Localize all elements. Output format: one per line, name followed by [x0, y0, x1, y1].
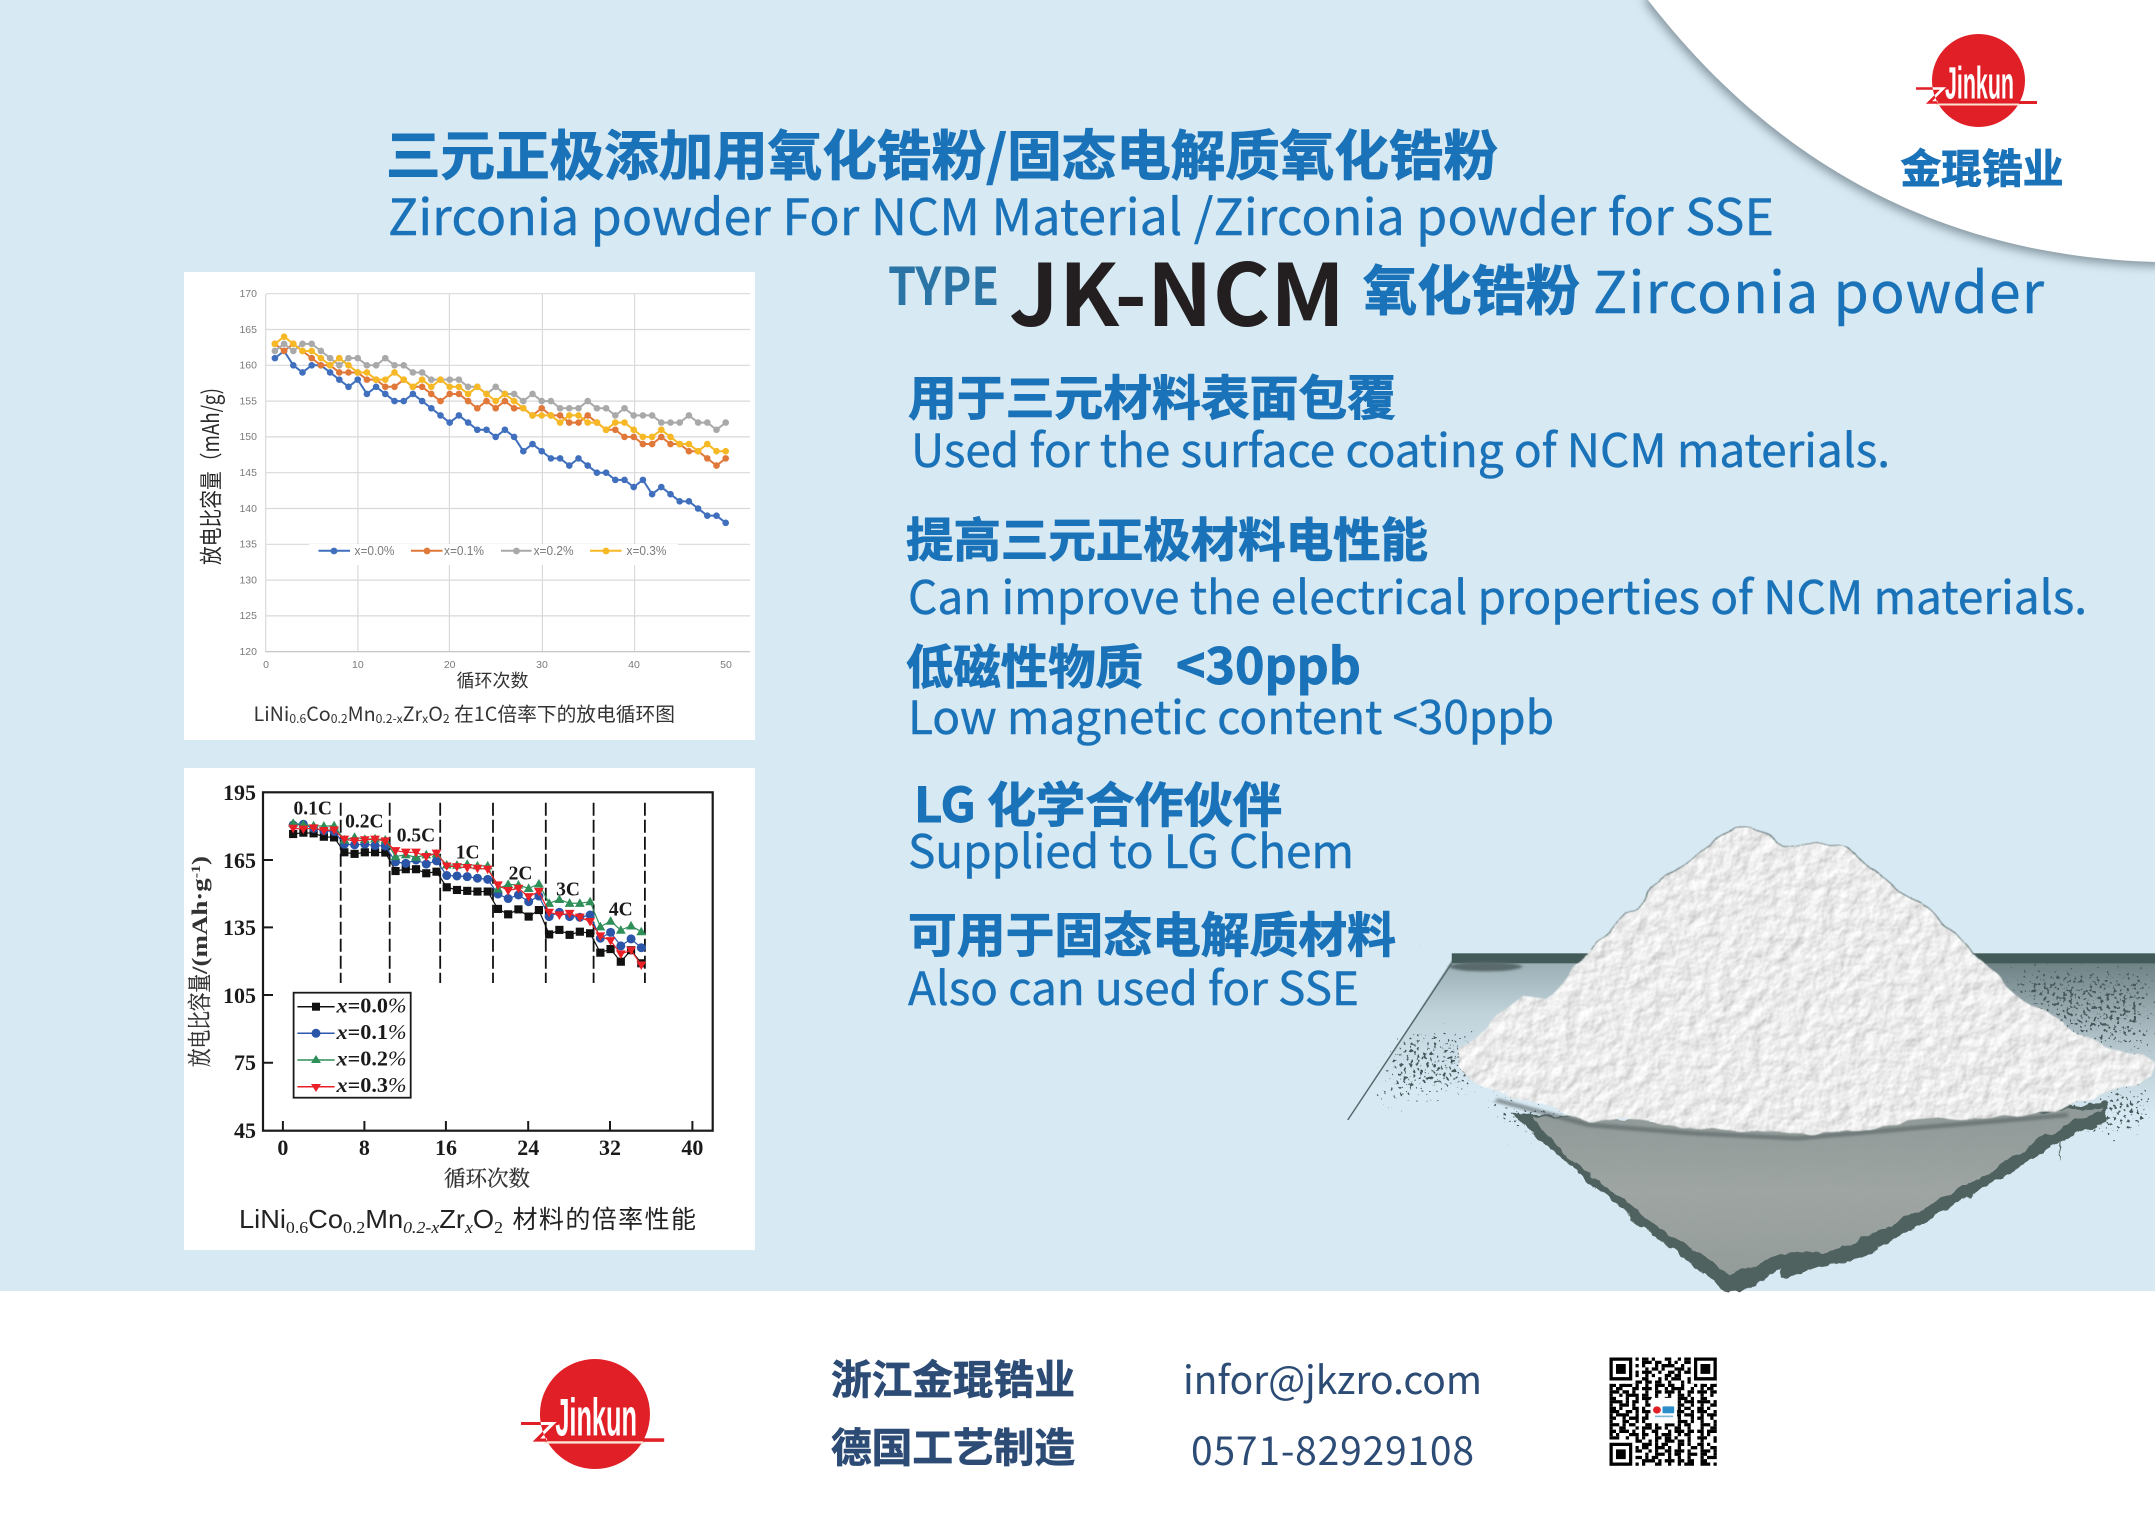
y axis ticks: 160	[239, 360, 257, 372]
footer logo: Jinkun: Jinkun	[555, 1388, 637, 1447]
feature: SSE: 可用于固态电解质材料	[908, 896, 1396, 966]
y axis ticks: 140	[239, 503, 257, 515]
y axis title	[187, 856, 214, 1067]
feature: surface coating	[908, 359, 1890, 481]
brand name: 金琨锆业	[1900, 136, 2064, 195]
caption: 0.2	[331, 710, 348, 727]
y axis title: -1	[188, 865, 203, 878]
caption: Mn	[348, 698, 376, 727]
rate labels: 0.2C	[345, 812, 384, 832]
feature: LG Chem	[908, 766, 1354, 882]
legend: x=0.3%	[335, 1073, 406, 1097]
feature: electrical properties	[906, 502, 2087, 628]
caption: 0.6	[286, 1218, 308, 1237]
white footer band	[0, 1291, 2155, 1519]
type line	[888, 226, 2045, 351]
x axis title: 循环次数	[456, 667, 528, 693]
caption: Zr	[403, 698, 423, 727]
y axis title: 放电比容量（mAh/g)	[192, 388, 226, 565]
title: Chinese: 三元正极添加用氧化锆粉/固态电解质氧化锆粉	[386, 112, 1498, 191]
QR code	[1610, 1358, 1717, 1466]
legend	[318, 544, 666, 558]
y axis ticks: 155	[239, 396, 257, 408]
y axis ticks	[239, 288, 257, 658]
x axis ticks: 16	[435, 1135, 457, 1160]
feature: LG Chem: Supplied to LG Chem	[908, 816, 1354, 882]
white curved corner panel	[1648, 0, 2155, 262]
caption: 0.2	[343, 1218, 365, 1237]
x axis title: 循环次数	[444, 1167, 530, 1191]
y axis title: 放电比容量	[187, 974, 214, 1067]
panel: rate chart	[184, 768, 755, 1250]
glass plate	[1348, 953, 2155, 1133]
feature: SSE	[908, 896, 1396, 1019]
y axis title: /(mAh·g	[187, 896, 212, 974]
y axis ticks: 165	[239, 324, 257, 336]
caption: Zr	[439, 1204, 465, 1234]
x axis ticks: 30	[536, 659, 548, 671]
caption: Mn	[365, 1204, 403, 1234]
type line: Zirconia powder	[1593, 248, 2045, 330]
x axis ticks: 0	[277, 1135, 288, 1160]
rate labels: 0.1C	[293, 798, 332, 820]
contact details: infor@jkzro.com	[1183, 1350, 1482, 1406]
x axis ticks: 40	[628, 659, 640, 671]
y axis ticks: 120	[239, 646, 257, 658]
plot frame	[263, 792, 713, 1131]
x axis ticks: 40	[681, 1135, 703, 1160]
caption: 2	[494, 1218, 503, 1237]
company name: 德国工艺制造	[831, 1415, 1075, 1474]
caption: Co	[306, 698, 331, 727]
header logo: Jinkun: Jinkun	[1945, 58, 2014, 108]
caption: O	[428, 698, 443, 727]
rate labels: 0.5C	[397, 826, 435, 846]
caption: 0.2-x	[403, 1218, 440, 1237]
company name: 浙江金琨锆业	[831, 1347, 1075, 1406]
x axis ticks	[277, 1135, 703, 1160]
feature: SSE: Also can used for SSE	[908, 953, 1359, 1019]
reflection of pile	[1512, 1103, 2107, 1295]
x axis ticks: 32	[599, 1135, 621, 1160]
feature: low magnetic: Low magnetic content <30ppb	[908, 682, 1554, 748]
y axis ticks: 135	[223, 915, 256, 940]
y axis ticks: 75	[234, 1050, 256, 1075]
x axis ticks: 50	[720, 659, 732, 671]
feature: surface coating: 用于三元材料表面包覆	[908, 359, 1396, 429]
caption: x	[422, 710, 428, 727]
y axis ticks: 125	[239, 610, 257, 622]
y axis ticks	[223, 780, 256, 1143]
y axis ticks: 170	[239, 288, 257, 300]
title: English: Zirconia powder For NCM Material /Zirconia powder for SSE	[388, 178, 1774, 250]
legend: x=0.0%	[354, 544, 394, 558]
rate labels: 1C	[456, 842, 480, 864]
y axis ticks: 145	[239, 467, 257, 479]
caption: LiNi	[254, 698, 289, 727]
x axis ticks	[263, 659, 732, 671]
caption: 0.6	[289, 710, 307, 727]
feature: low magnetic: <30ppb	[1176, 627, 1361, 699]
y axis ticks: 45	[234, 1118, 256, 1143]
legend: x=0.0%	[335, 994, 406, 1018]
feature: electrical properties: 提高三元正极材料电性能	[906, 502, 1428, 571]
series	[293, 823, 641, 965]
y axis ticks: 135	[239, 538, 257, 550]
rate labels	[293, 798, 633, 920]
caption: O	[473, 1204, 494, 1234]
caption: 2	[443, 710, 450, 727]
caption	[239, 1200, 696, 1237]
panel: cycle chart	[184, 272, 755, 740]
caption: Co	[308, 1204, 343, 1234]
x axis ticks: 20	[444, 659, 456, 671]
legend	[294, 993, 411, 1098]
feature: surface coating: Used for the surface coating of NCM materials.	[911, 415, 1890, 481]
type line: 氧化锆粉	[1363, 247, 1580, 326]
caption: x	[464, 1218, 473, 1237]
x axis ticks: 10	[352, 659, 364, 671]
legend: x=0.3%	[626, 544, 666, 558]
feature: electrical properties: Can improve the electrical properties of NCM materials.	[908, 562, 2087, 628]
white pile	[1457, 825, 2153, 1133]
y axis ticks: 195	[223, 780, 256, 805]
y axis ticks: 165	[223, 848, 256, 873]
caption: 0.2-x	[376, 710, 403, 727]
scattered powder specks	[1366, 967, 2155, 1153]
company name	[831, 1347, 1075, 1474]
feature: LG Chem: LG 化学合作伙伴	[914, 766, 1282, 836]
x axis ticks: 0	[263, 659, 269, 671]
contact details: 0571-82929108	[1191, 1421, 1474, 1477]
rate labels: 3C	[556, 880, 580, 900]
legend: x=0.1%	[335, 1020, 406, 1044]
x axis ticks: 8	[359, 1135, 370, 1160]
type line: JK-NCM	[1009, 226, 1345, 351]
legend: x=0.1%	[444, 544, 484, 558]
legend: x=0.2%	[534, 544, 574, 558]
rate dividers	[341, 803, 645, 983]
rate labels: 2C	[509, 864, 532, 884]
type line: TYPE	[888, 245, 999, 320]
y axis title: )	[187, 856, 212, 865]
x axis ticks: 24	[517, 1135, 539, 1160]
contact details	[1183, 1350, 1482, 1477]
y axis ticks: 150	[239, 431, 257, 443]
footer logo: Jinkun	[521, 1359, 664, 1469]
caption: 在1C倍率下的放电循环图	[450, 698, 675, 727]
y axis ticks: 130	[239, 574, 257, 586]
rate labels: 4C	[609, 900, 633, 920]
feature: low magnetic: 低磁性物质	[906, 629, 1143, 698]
feature: low magnetic	[906, 627, 1554, 748]
y axis ticks: 105	[223, 983, 256, 1008]
caption: LiNi	[239, 1204, 284, 1234]
dark fringe under pile	[1496, 1100, 2068, 1138]
series	[275, 337, 726, 523]
header logo: Jinkun	[1916, 34, 2037, 127]
legend: x=0.2%	[335, 1046, 406, 1070]
powder pile on glass plate	[1348, 825, 2155, 1295]
caption: 材料的倍率性能	[512, 1200, 696, 1236]
